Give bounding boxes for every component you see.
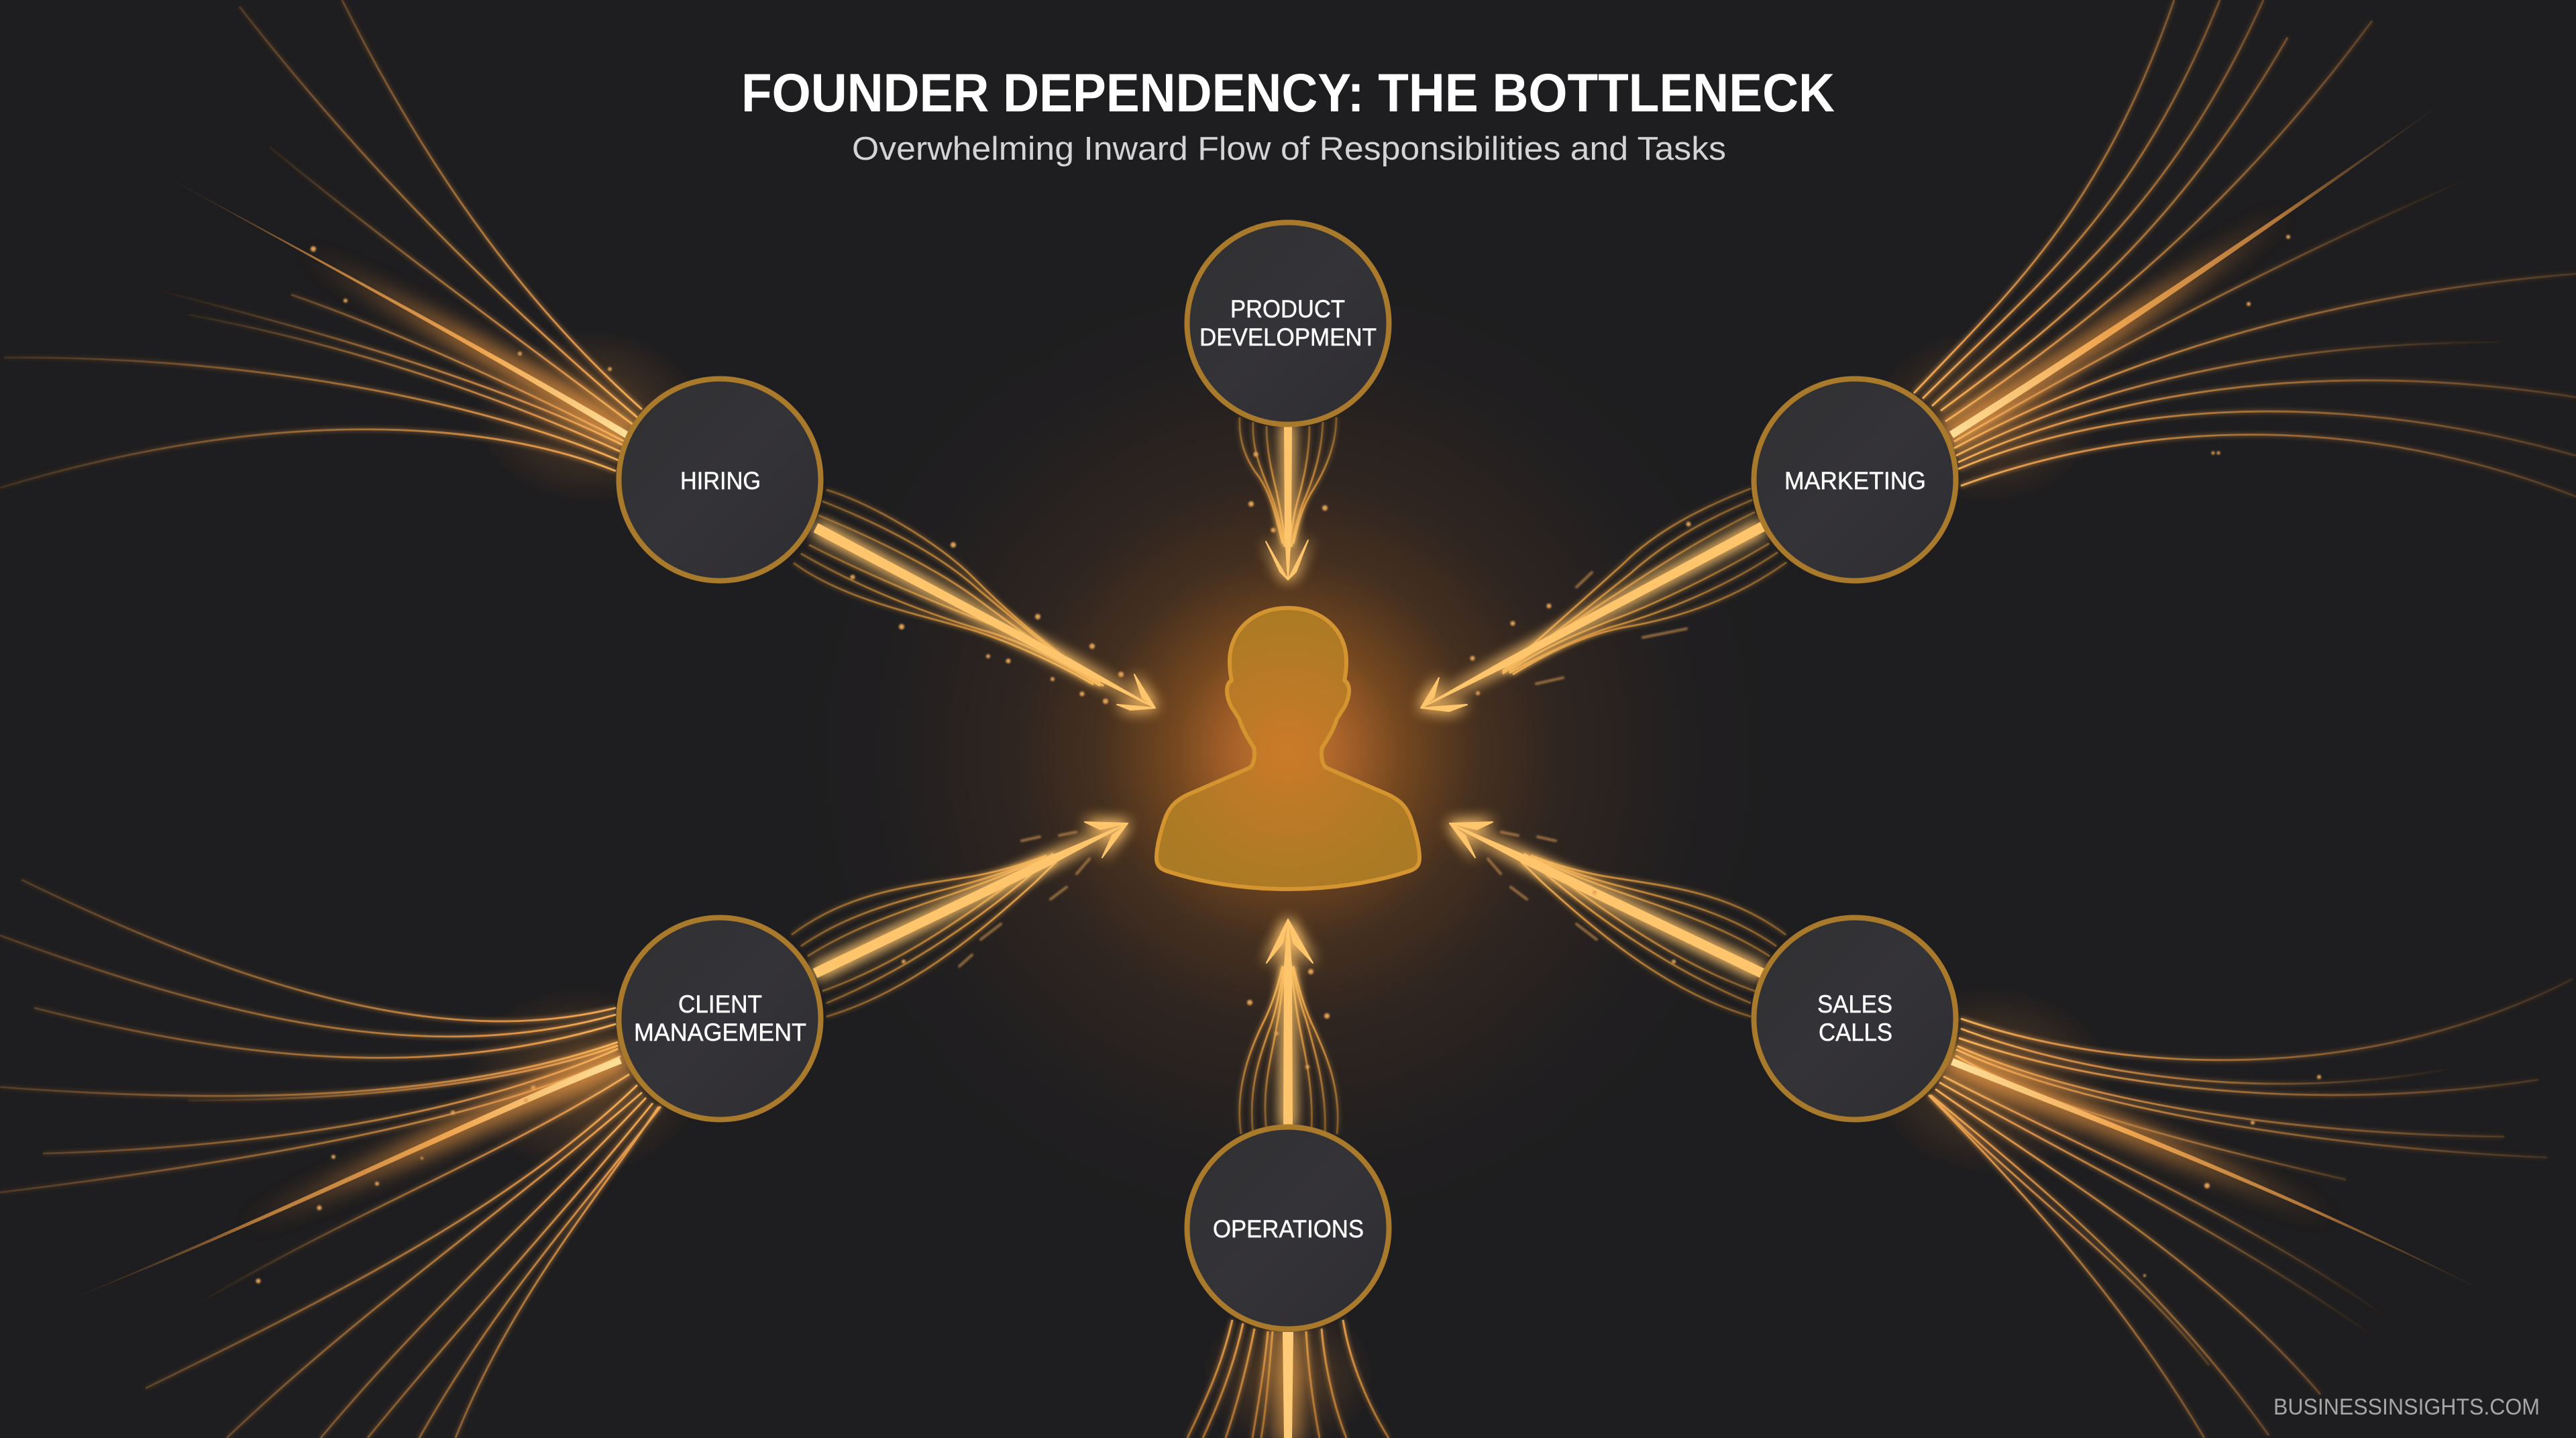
arrow: operations to founder xyxy=(1240,919,1338,1134)
node: operations xyxy=(1187,1127,1389,1329)
sparks and streaks xyxy=(256,235,2321,1283)
incoming task streams: operations xyxy=(1187,1302,1389,1438)
arrow: product development to founder xyxy=(1240,417,1336,580)
node: hiring xyxy=(619,378,821,581)
icon: founder silhouette xyxy=(1157,608,1419,889)
arrow: sales calls to founder xyxy=(1450,822,1786,1017)
node: sales calls: CALLS xyxy=(1819,1019,1892,1046)
node: product development: DEVELOPMENT xyxy=(1199,323,1377,351)
incoming task streams: sales calls xyxy=(1872,979,2573,1438)
node: product development xyxy=(1187,223,1389,424)
node: client management xyxy=(619,918,821,1119)
subtitle: Overwhelming Inward Flow of Responsibilities and Tasks xyxy=(852,131,1726,167)
node: client management: CLIENT xyxy=(678,990,762,1018)
central orange glow xyxy=(792,255,1784,1248)
node: hiring: HIRING xyxy=(680,467,761,495)
node: client management: MANAGEMENT xyxy=(634,1019,806,1046)
node: sales calls: SALES xyxy=(1817,990,1892,1018)
arrow: hiring to founder xyxy=(794,490,1155,710)
watermark: BUSINESSINSIGHTS.COM xyxy=(2273,1394,2540,1420)
arrow: marketing to founder xyxy=(1421,489,1786,711)
arrow: client management to founder xyxy=(792,822,1128,1017)
incoming task streams: hiring xyxy=(0,0,704,503)
node: marketing xyxy=(1754,378,1956,581)
node: marketing: MARKETING xyxy=(1784,467,1926,495)
node: sales calls xyxy=(1754,918,1956,1119)
incoming task streams: marketing xyxy=(1872,0,2576,503)
title: FOUNDER DEPENDENCY: THE BOTTLENECK xyxy=(741,63,1835,123)
incoming task streams: client management xyxy=(0,880,704,1438)
node: operations: OPERATIONS xyxy=(1213,1215,1364,1243)
node: product development: PRODUCT xyxy=(1230,295,1345,323)
